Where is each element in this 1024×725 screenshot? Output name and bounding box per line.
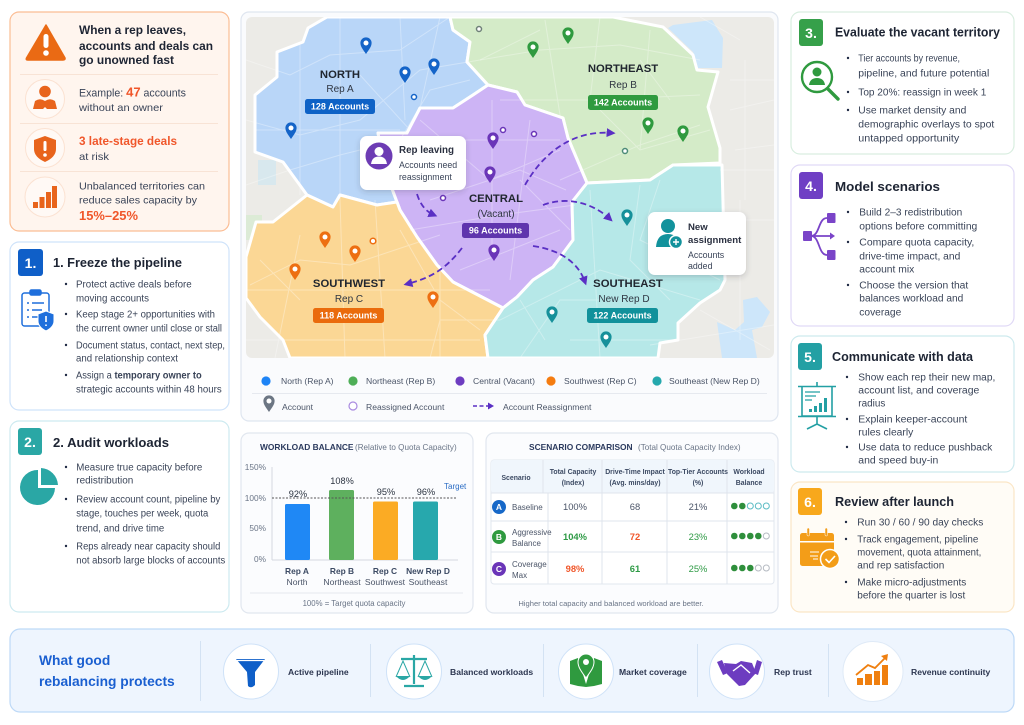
comparison table: 98% — [566, 563, 585, 574]
stat: late-stage deals: at risk — [79, 152, 110, 163]
pins: central — [440, 128, 536, 261]
table note: Higher total capacity and balanced workload are better. — [518, 599, 704, 608]
label: north: Rep A — [326, 84, 354, 95]
comparison table: Coverage — [512, 560, 547, 569]
label: southwest — [313, 278, 385, 323]
comparison table: Aggressive — [512, 528, 552, 537]
callout: rep leaving — [360, 136, 466, 190]
bar chart: 50% — [249, 523, 267, 533]
list 3: Tier accounts by revenue, — [858, 54, 960, 64]
legend: Southeast (New Rep D) — [669, 376, 760, 386]
panel: alert summary — [10, 12, 229, 231]
table title: SCENARIO COMPARISON — [529, 442, 633, 452]
comparison table: 61 — [630, 563, 640, 574]
label: southwest: SOUTHWEST — [313, 278, 385, 290]
chart title — [260, 442, 457, 452]
label: southeast — [587, 278, 663, 323]
item: active pipeline — [224, 644, 349, 699]
comparison table: C — [496, 564, 502, 574]
label: southeast: SOUTHEAST — [593, 278, 663, 290]
stat: sales capacity: reduce sales capacity by — [79, 196, 198, 206]
label: southwest: 118 Accounts — [320, 310, 377, 320]
banner heading: rebalancing protects — [39, 674, 175, 689]
bar chart: North — [286, 577, 308, 587]
bar chart: 100% — [245, 493, 267, 503]
label: north: NORTH — [320, 69, 360, 81]
banner heading — [39, 653, 175, 689]
region: north — [255, 17, 488, 207]
list 6: movement, quota attainment, — [857, 548, 981, 558]
callout: rep leaving: Accounts need — [399, 160, 457, 170]
table title: (Total Quota Capacity Index) — [638, 443, 741, 452]
list 4: account mix — [859, 264, 914, 276]
icon: warning triangle — [26, 25, 65, 60]
list 1: Document status, contact, next step, — [76, 340, 225, 352]
stat: sales capacity: 15%–25% — [79, 208, 139, 223]
pins: northeast — [476, 26, 689, 154]
item: revenue continuity — [843, 642, 990, 702]
callout: new assignment: Accounts — [688, 250, 725, 260]
table title — [529, 442, 741, 452]
comparison table — [491, 460, 774, 584]
callout: new assignment: assignment — [688, 235, 742, 246]
legend: Southwest (Rep C) — [564, 376, 637, 386]
heading 3: Evaluate the vacant territory — [835, 24, 1001, 40]
pins: southeast — [546, 209, 633, 348]
list 4: Build 2–3 redistribution — [859, 208, 962, 218]
icon: magnifier person — [802, 62, 838, 99]
list 6: Track engagement, pipeline — [857, 534, 979, 546]
bar chart: Northeast — [323, 577, 361, 587]
list 1: Assign a temporary owner to — [76, 370, 202, 382]
callout: rep leaving: reassignment — [399, 172, 452, 182]
stat: late-stage deals: 3 late-stage deals — [79, 135, 177, 148]
panel: step 2 audit workloads — [10, 421, 229, 612]
badge 1 — [18, 249, 43, 276]
list 3: demographic overlays to spot — [858, 120, 995, 130]
badge 5: 5. — [804, 349, 816, 365]
label: central: 96 Accounts — [469, 226, 522, 236]
pins: north — [285, 37, 440, 139]
stat: accounts without owner: Example: 47 accounts — [79, 84, 186, 100]
item: balanced workloads — [386, 644, 533, 699]
badge 3 — [799, 19, 823, 46]
icon: presentation board — [798, 382, 836, 429]
stat: sales capacity — [79, 182, 205, 223]
list 2 — [66, 462, 225, 566]
icon: calendar check — [800, 528, 840, 568]
label: central — [462, 193, 529, 238]
list 1: strategic accounts within 48 hours — [76, 384, 222, 396]
icon: bars — [25, 177, 65, 217]
heading 2: 2. Audit workloads — [53, 435, 169, 450]
icon: clipboard with shield — [22, 290, 54, 331]
icon: branching scenarios — [803, 213, 836, 260]
item: revenue continuity: Revenue continuity — [911, 667, 990, 677]
list 1: Protect active deals before — [76, 280, 192, 290]
list 2: Reps already near capacity should — [76, 542, 220, 552]
panel: step 1 freeze the pipeline — [10, 242, 229, 410]
comparison table: Max — [512, 571, 527, 580]
label: southwest: Rep C — [335, 294, 363, 305]
panel: scenario comparison — [486, 433, 778, 613]
comparison table: 104% — [563, 531, 588, 542]
label: northeast — [588, 63, 658, 110]
comparison table: (%) — [693, 480, 703, 487]
chart note: 100% = Target quota capacity — [303, 599, 405, 608]
bar chart: Target — [444, 482, 467, 491]
alert heading — [79, 23, 213, 67]
comparison table: B — [496, 532, 502, 542]
badge 6: 6. — [804, 494, 816, 510]
list 1: the current owner until close or stall — [76, 324, 222, 334]
icon: pie chart — [20, 468, 58, 505]
comparison table: Balance — [736, 480, 762, 487]
list 2: redistribution — [76, 476, 133, 486]
bar chart: Rep B — [330, 566, 354, 576]
item: rep trust — [710, 644, 812, 699]
label: north — [305, 69, 375, 114]
bar chart: Southeast — [409, 577, 448, 587]
legend: Account — [282, 402, 314, 412]
bar chart: Rep A — [285, 566, 309, 576]
comparison table: Top-Tier Accounts — [668, 469, 728, 476]
badge 3: 3. — [805, 25, 817, 41]
comparison table: 72 — [630, 531, 640, 542]
callout: new assignment: New — [688, 222, 708, 233]
alert heading: accounts and deals can — [79, 39, 213, 53]
panel: territory map — [241, 12, 778, 421]
list 2: trend, and drive time — [76, 524, 165, 534]
list 5: Explain keeper-account — [858, 414, 968, 426]
item: market coverage — [558, 644, 687, 699]
list 3 — [848, 54, 995, 144]
list 6: before the quarter is lost — [857, 590, 966, 602]
banner heading: What good — [39, 653, 110, 668]
heading 1: 1. Freeze the pipeline — [53, 255, 182, 270]
region: southwest — [246, 195, 503, 358]
list 1: and relationship context — [76, 354, 178, 364]
chart title: WORKLOAD BALANCE — [260, 442, 354, 452]
panel: step 6 review — [791, 482, 1014, 612]
legend: Account Reassignment — [503, 402, 592, 412]
legend: Reassigned Account — [366, 402, 445, 412]
map — [246, 17, 774, 358]
list 3: untapped opportunity — [858, 134, 959, 144]
list 5: Show each rep their new map, — [858, 372, 995, 384]
bar chart: 108% — [330, 476, 354, 486]
comparison table: Scenario — [501, 475, 531, 482]
list 4: coverage — [859, 308, 902, 318]
label: southeast: 122 Accounts — [593, 310, 652, 320]
list 1: moving accounts — [76, 294, 149, 304]
item: rep trust: Rep trust — [774, 667, 812, 677]
list 6: and rep satisfaction — [857, 560, 944, 572]
stat: accounts without owner: without an owner — [78, 103, 164, 114]
item: active pipeline: Active pipeline — [288, 667, 349, 677]
list 5: radius — [858, 398, 885, 410]
stat: sales capacity: Unbalanced territories can — [79, 182, 205, 192]
badge 4: 4. — [805, 178, 817, 194]
comparison table: 100% — [563, 501, 587, 512]
label: northeast: NORTHEAST — [588, 63, 658, 75]
panel: step 3 evaluate — [791, 12, 1014, 154]
comparison table: Balance — [512, 539, 541, 548]
stat: accounts without owner — [78, 84, 186, 114]
heading 4: Model scenarios — [835, 179, 940, 194]
bar chart: 150% — [245, 462, 267, 472]
region: northeast — [450, 17, 720, 183]
comparison table: Drive-Time Impact — [605, 469, 666, 476]
list 6: Make micro-adjustments — [857, 578, 966, 588]
bar chart — [245, 462, 467, 587]
panel: step 5 communicate — [791, 336, 1014, 472]
panel: what good rebalancing protects — [10, 629, 1014, 712]
list 4: Choose the version that — [859, 280, 969, 292]
region: central — [378, 85, 587, 308]
bar chart: 96% — [417, 487, 435, 497]
list 6 — [846, 518, 983, 602]
list 2: Review account count, pipeline by — [76, 494, 220, 506]
label: central: CENTRAL — [469, 193, 523, 205]
comparison table: A — [496, 502, 502, 512]
heading 6: Review after launch — [835, 494, 954, 509]
list 2: Measure true capacity before — [76, 462, 203, 474]
comparison table: (Index) — [562, 480, 584, 487]
panel: workload balance chart — [241, 433, 473, 613]
item: market coverage: Market coverage — [619, 667, 687, 677]
callout: rep leaving: Rep leaving — [399, 145, 454, 156]
comparison table: 68 — [630, 501, 640, 512]
icon: person with accounts — [26, 80, 64, 118]
list 3: pipeline, and future potential — [858, 68, 989, 80]
bar chart: New Rep D — [406, 566, 450, 576]
badge 2 — [18, 428, 42, 455]
legend: Northeast (Rep B) — [366, 376, 435, 386]
bar chart: 95% — [377, 487, 395, 497]
badge 2: 2. — [24, 434, 36, 450]
list 5: Use data to reduce pushback — [858, 442, 992, 454]
bar chart: Rep C — [373, 566, 397, 576]
list 4: options before committing — [859, 222, 977, 232]
list 4: Compare quota capacity, — [859, 238, 974, 248]
chart title: (Relative to Quota Capacity) — [355, 443, 457, 452]
item: balanced workloads: Balanced workloads — [450, 667, 533, 677]
list 5: and speed buy-in — [858, 456, 938, 466]
comparison table: Total Capacity — [550, 469, 596, 476]
list 4: drive-time impact, and — [859, 252, 960, 262]
bar chart: Southwest — [365, 577, 406, 587]
region: southeast — [485, 165, 725, 358]
alert heading: When a rep leaves, — [79, 23, 186, 37]
legend: North (Rep A) — [281, 376, 334, 386]
list 4 — [848, 208, 977, 318]
heading 5: Communicate with data — [832, 349, 974, 364]
label: northeast: Rep B — [609, 80, 637, 91]
comparison table: 25% — [689, 563, 707, 574]
label: southeast: New Rep D — [598, 294, 650, 305]
list 2: not absorb large blocks of accounts — [76, 556, 225, 566]
list 5: rules clearly — [858, 428, 913, 438]
icon: shield alert — [26, 128, 64, 168]
list 5 — [847, 372, 995, 466]
stat: late-stage deals — [79, 135, 177, 163]
list 3: Top 20%: reassign in week 1 — [858, 88, 986, 98]
comparison table: Baseline — [512, 503, 543, 512]
pins: southwest — [289, 231, 439, 308]
alert heading: go unowned fast — [79, 53, 174, 67]
badge 1: 1. — [25, 255, 36, 271]
list 2: stage, touches per week, quota — [76, 508, 209, 520]
label: northeast: 142 Accounts — [594, 98, 652, 108]
comparison table: (Avg. mins/day) — [609, 480, 661, 487]
list 1: Keep stage 2+ opportunities with — [76, 310, 215, 320]
bar chart: 0% — [254, 554, 267, 564]
callout: new assignment: added — [688, 261, 713, 271]
legend: Central (Vacant) — [473, 376, 535, 386]
legend — [252, 376, 767, 412]
badge 4 — [799, 172, 823, 199]
list 6: Run 30 / 60 / 90 day checks — [857, 518, 983, 528]
list 1 — [66, 280, 225, 396]
list 4: balances workload and — [859, 294, 963, 304]
badge 5 — [798, 343, 822, 370]
comparison table: 23% — [689, 531, 707, 542]
panel: step 4 model scenarios — [791, 165, 1014, 326]
label: north: 128 Accounts — [311, 102, 369, 112]
arrows: account reassignment — [407, 133, 612, 284]
label: central: (Vacant) — [477, 209, 515, 220]
comparison table: 21% — [689, 501, 707, 512]
list 3: Use market density and — [858, 106, 966, 116]
bar chart: 92% — [289, 489, 307, 499]
badge 6 — [798, 488, 822, 515]
comparison table: Workload — [733, 469, 765, 476]
callout: new assignment — [648, 212, 746, 275]
list 5: account list, and coverage — [858, 386, 980, 396]
